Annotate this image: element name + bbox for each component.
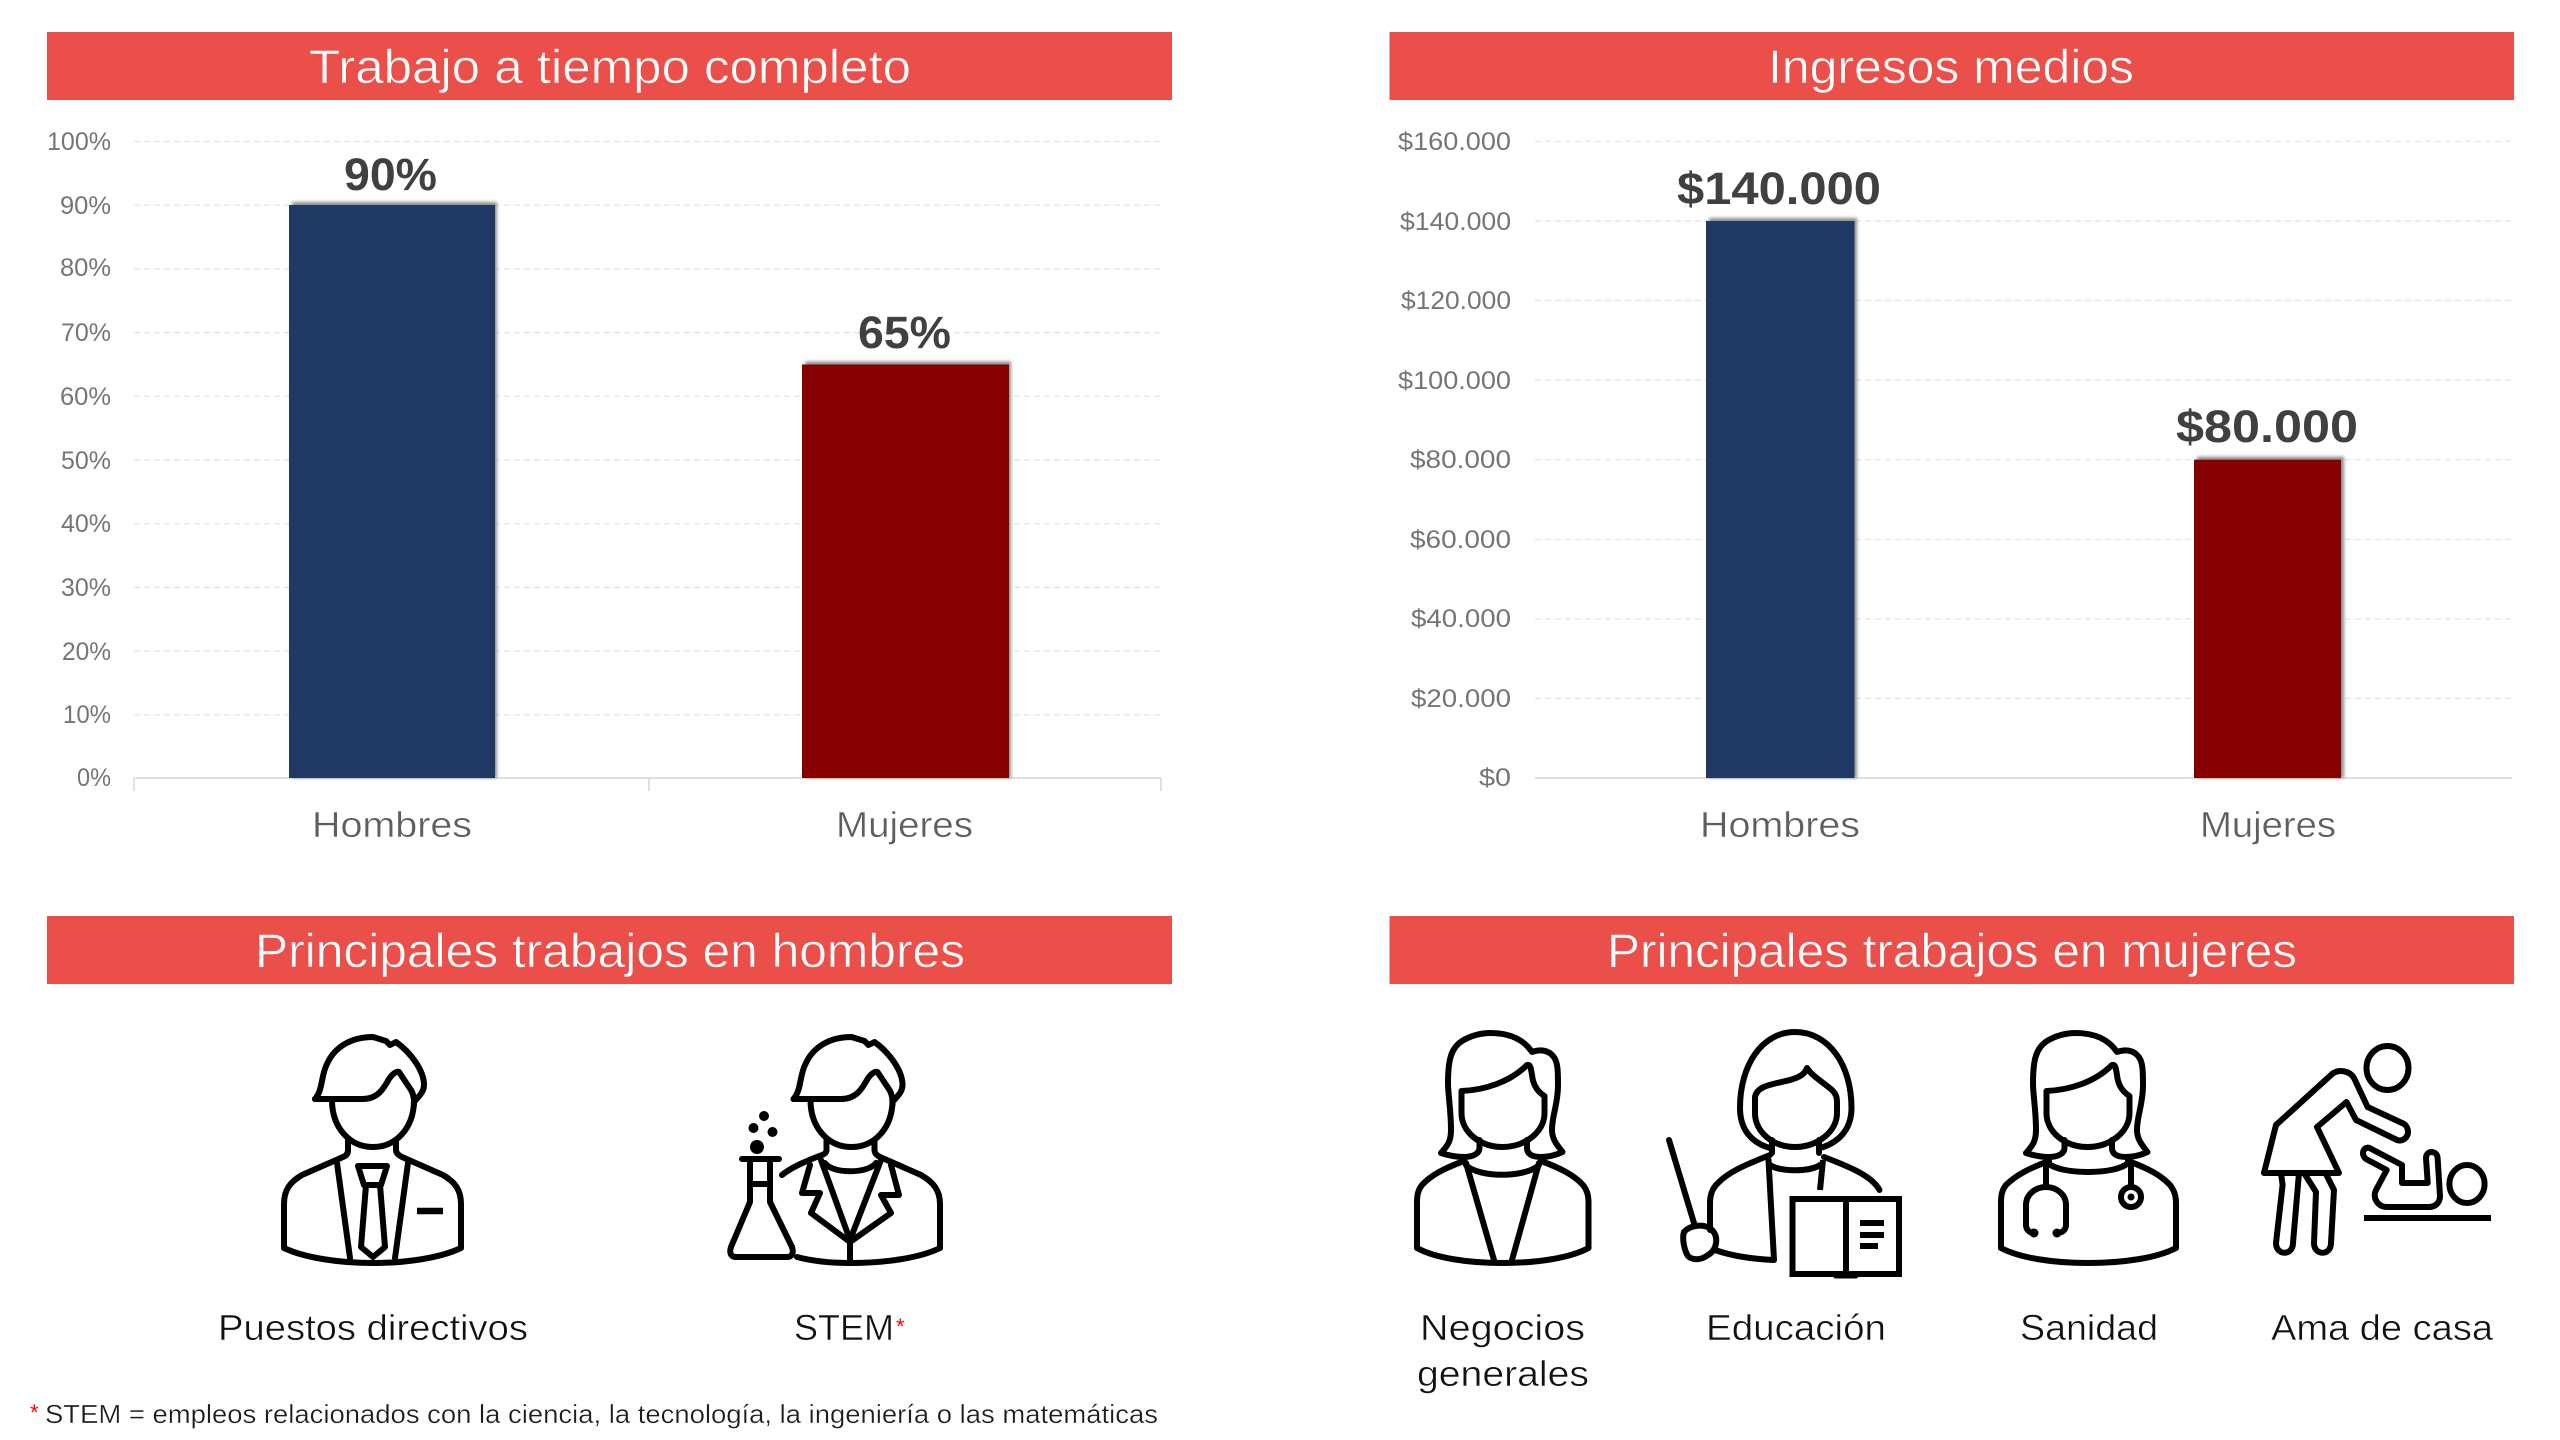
label: sanidad: Sanidad [2020, 1307, 2158, 1348]
value: $80.000: $80.000 [2176, 401, 2358, 452]
y axis labels: 10% [63, 701, 111, 729]
label: STEM: * [896, 1314, 905, 1339]
category: hombres: Hombres [312, 804, 472, 845]
bar: mujeres 65% [802, 362, 1011, 778]
bar chart: trabajo a tiempo completo [47, 128, 1161, 845]
panel: principales trabajos en mujeres [1390, 916, 2514, 1394]
icon: científico con matraz [730, 1037, 940, 1263]
heading: ingresos medios [1390, 32, 2514, 100]
icon: madre cambiando al bebé [2264, 1046, 2491, 1253]
label: puestos directivos: Puestos directivos [218, 1307, 528, 1348]
y axis labels [47, 128, 111, 792]
value: $140.000: $140.000 [1677, 163, 1881, 214]
footnote: STEM: * [30, 1400, 39, 1425]
y axis labels: $80.000 [1410, 446, 1511, 474]
icon: mujer de negocios [1417, 1033, 1588, 1263]
category: mujeres: Mujeres [836, 804, 973, 845]
heading: ingresos medios: Ingresos medios [1768, 40, 2134, 93]
heading: principales trabajos en hombres [47, 916, 1172, 984]
y axis labels: 40% [61, 510, 111, 538]
y axis labels: 70% [61, 319, 111, 347]
icon: sanitaria con estetoscopio [2001, 1033, 2176, 1263]
label: negocios generales: generales [1417, 1353, 1589, 1394]
value: 90%: 90% [344, 149, 437, 200]
value: 65%: 65% [858, 307, 951, 358]
y axis labels: 60% [60, 383, 111, 411]
heading: trabajo a tiempo completo: Trabajo a tiempo completo [309, 40, 911, 93]
panel: principales trabajos en hombres [30, 916, 1172, 1429]
label: ama de casa: Ama de casa [2271, 1307, 2494, 1348]
icon: directivo [284, 1037, 461, 1263]
bar chart: ingresos medios [1398, 128, 2512, 845]
y axis labels: $100.000 [1398, 367, 1511, 395]
y axis labels: 90% [60, 192, 111, 220]
y axis labels: $160.000 [1398, 128, 1511, 156]
category: hombres: Hombres [1700, 804, 1860, 845]
bar: hombres 90% [289, 202, 497, 778]
heading: principales trabajos en mujeres [1390, 916, 2514, 984]
panel: trabajo a tiempo completo [47, 32, 1172, 845]
label: negocios generales: Negocios [1420, 1307, 1585, 1348]
heading: trabajo a tiempo completo [47, 32, 1172, 100]
category: mujeres: Mujeres [2200, 804, 2336, 845]
y axis labels: $0 [1479, 764, 1511, 792]
y axis labels: $40.000 [1411, 605, 1511, 633]
bar: mujeres $80.000 [2194, 457, 2344, 778]
label: STEM: STEM [794, 1307, 894, 1348]
y axis labels: 30% [61, 574, 111, 602]
heading: principales trabajos en mujeres: Principales trabajos en mujeres [1607, 924, 2297, 977]
heading: principales trabajos en hombres: Principales trabajos en hombres [255, 924, 965, 977]
icon: profesora con libro [1669, 1032, 1899, 1278]
label: negocios generales [1417, 1307, 1589, 1394]
bar: hombres $140.000 [1706, 218, 1857, 778]
y axis labels [1398, 128, 1511, 792]
label: educación: Educación [1706, 1307, 1886, 1348]
y axis labels: 50% [61, 447, 111, 475]
y axis labels: 100% [47, 128, 111, 156]
panel: ingresos medios [1390, 32, 2514, 845]
y axis labels: 20% [62, 638, 111, 666]
y axis labels: $20.000 [1411, 685, 1511, 713]
y axis labels: $60.000 [1410, 526, 1511, 554]
y axis labels: 80% [60, 254, 111, 282]
y axis labels: $120.000 [1401, 287, 1511, 315]
footnote: STEM: STEM = empleos relacionados con la ciencia, la tecnología, la ingeniería o las matemáticas [45, 1399, 1158, 1429]
y axis labels: $140.000 [1400, 208, 1511, 236]
y axis labels: 0% [77, 764, 111, 792]
